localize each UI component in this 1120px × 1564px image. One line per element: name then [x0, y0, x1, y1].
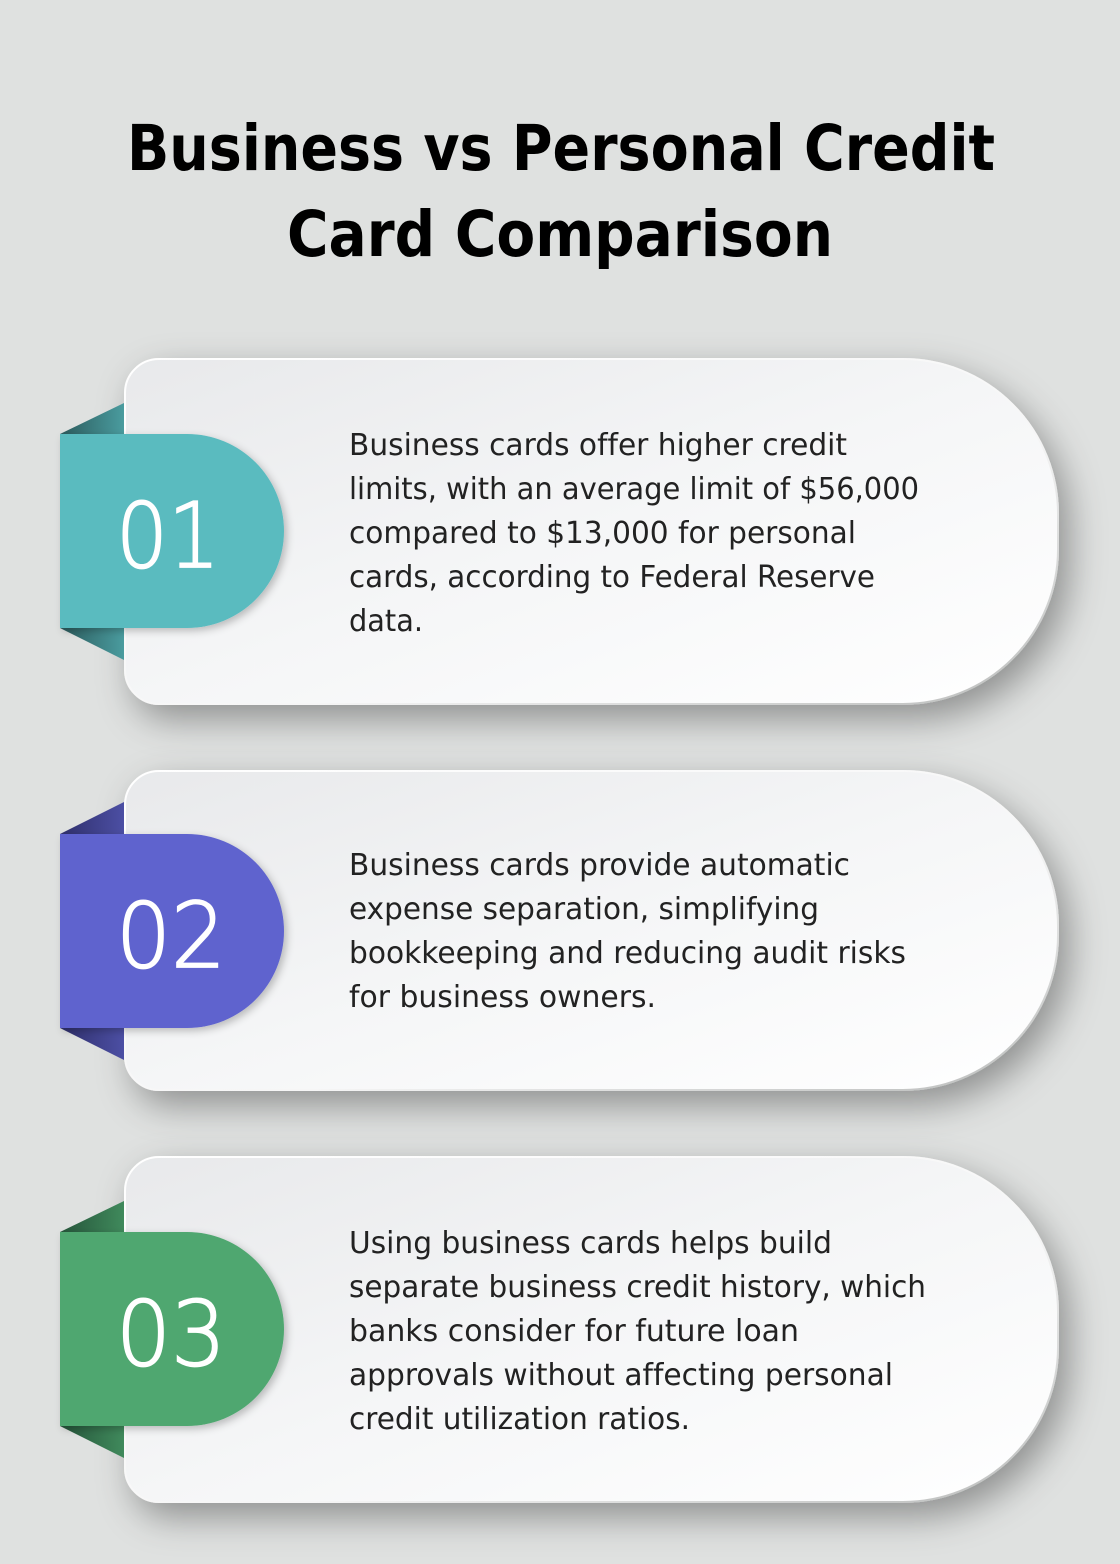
ribbon fold top 03: [60, 1201, 124, 1232]
text block 02: for business owners.: [349, 980, 656, 1015]
number badge 03: [60, 1232, 284, 1426]
text block 01: compared to $13,000 for personal: [349, 516, 856, 551]
ribbon fold top 01: [60, 403, 124, 434]
text block 03: Using business cards helps build: [349, 1226, 832, 1261]
card 02 background: [125, 771, 1058, 1090]
card 03 background: [125, 1157, 1058, 1502]
text block 01: cards, according to Federal Reserve: [349, 560, 875, 595]
ribbon fold top 02: [60, 802, 124, 834]
text block 02: expense separation, simplifying: [349, 892, 819, 927]
text block 03: credit utilization ratios.: [349, 1402, 690, 1437]
number badge 01: [60, 434, 284, 628]
ribbon fold bottom 01: [60, 628, 124, 660]
text block 03: separate business credit history, which: [349, 1270, 926, 1305]
text block 01: limits, with an average limit of $56,000: [349, 472, 919, 507]
title: [127, 112, 995, 271]
text block 03: approvals without affecting personal: [349, 1358, 893, 1393]
panel: step 03: [60, 1157, 1058, 1502]
text block 02: Business cards provide automatic: [349, 848, 850, 883]
number 03: 03: [116, 1282, 226, 1387]
number badge 02: [60, 834, 284, 1028]
text block 03: [349, 1226, 926, 1437]
number 02: 02: [116, 884, 226, 989]
title: Business vs Personal Credit: [127, 112, 995, 185]
panel: step 02: [60, 771, 1058, 1090]
text block 03: banks consider for future loan: [349, 1314, 799, 1349]
text block 02: [349, 848, 906, 1015]
text block 02: bookkeeping and reducing audit risks: [349, 936, 906, 971]
title: Card Comparison: [287, 198, 833, 271]
ribbon fold bottom 03: [60, 1426, 124, 1458]
text block 01: [349, 428, 919, 639]
text block 01: Business cards offer higher credit: [349, 428, 847, 463]
text block 01: data.: [349, 604, 423, 639]
number 01: 01: [116, 484, 220, 589]
card 01 background: [125, 359, 1058, 704]
ribbon fold bottom 02: [60, 1028, 124, 1060]
panel: step 01: [60, 359, 1058, 704]
